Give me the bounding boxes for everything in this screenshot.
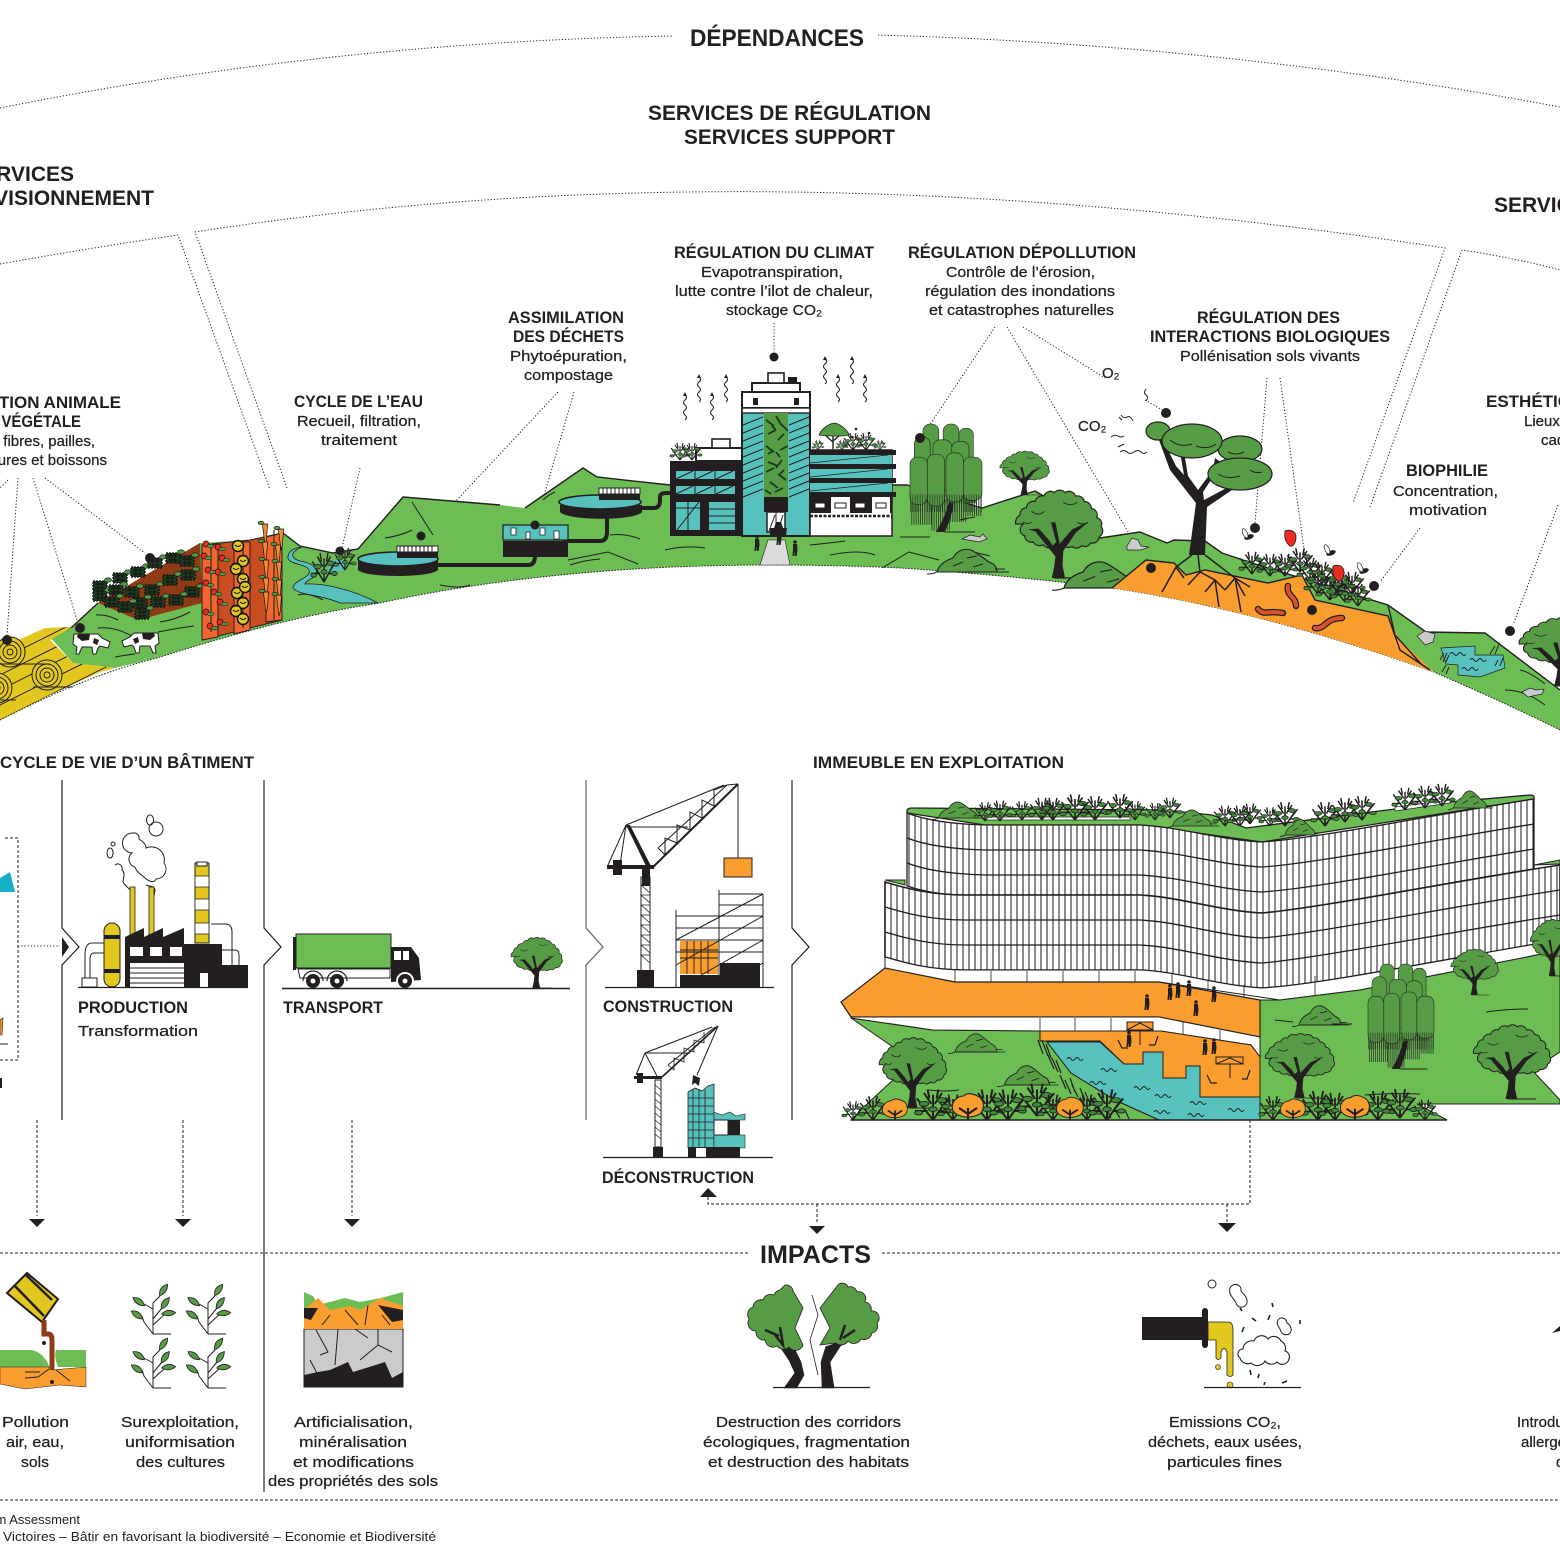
illustration: small tree — [1000, 451, 1049, 495]
label: régulation du climat: stockage CO₂ — [726, 302, 822, 319]
illustration: grazing cows — [73, 633, 159, 654]
illustration: umbrellas, chairs and people — [1118, 980, 1250, 1083]
building: white base band — [885, 940, 1560, 1000]
text: transport label: TRANSPORT — [283, 998, 384, 1017]
text: artificialisation: Artificialisation, — [294, 1414, 413, 1431]
heading: services d'approvisionnement (left, cropped) — [0, 163, 154, 210]
label: régulation dépollution: RÉGULATION DÉPOLLUTION — [908, 243, 1136, 262]
illustration: central green building — [670, 373, 896, 536]
stage: transport truck — [282, 934, 570, 1017]
text: pollution: sols — [21, 1454, 49, 1471]
footer sources — [0, 1512, 436, 1544]
stage: production factory — [78, 815, 248, 1040]
heading: impacts with dashed rule: IMPACTS — [760, 1241, 871, 1269]
heading: cycle de vie d'un bâtiment: CYCLE DE VIE D’UN BÂTIMENT — [0, 753, 255, 772]
dashed arrows from lifecycle stages to impacts — [29, 1120, 1250, 1234]
impact: artificialisation — [268, 1292, 438, 1490]
zone: orange plaza — [841, 968, 1260, 1057]
icon: split tree — [748, 1283, 879, 1388]
text: artificialisation — [268, 1414, 438, 1490]
zone: green lawn right — [1260, 950, 1560, 1120]
icon: partly demolished building — [603, 1084, 773, 1158]
label: cycle de l'eau: Recueil, filtration, — [297, 413, 421, 430]
label: cycle de l'eau: traitement — [321, 432, 398, 449]
label: production animale et végétale — [0, 393, 121, 469]
icon: scaffolded building — [605, 890, 774, 988]
label: cycle de l'eau: CYCLE DE L’EAU — [294, 392, 423, 411]
illustration: treatment station — [503, 525, 568, 557]
dotted bracket arc with diagonal leaders — [0, 192, 1560, 507]
text: artificialisation: minéralisation — [299, 1434, 407, 1451]
label: biophilie: motivation — [1409, 502, 1487, 519]
zone: teal water basin — [1038, 1040, 1260, 1120]
building: green roof and upper louvred block — [907, 795, 1534, 913]
footer sources: Victoires – Bâtir en favorisant la biodiversité – Economie et Biodiversité — [3, 1529, 436, 1544]
text: emissions: déchets, eaux usées, — [1148, 1434, 1302, 1451]
label: régulation dépollution: Contrôle de l’érosion, — [946, 264, 1095, 281]
building: left wing — [670, 439, 742, 536]
illustration: roof garden plants — [932, 784, 1493, 836]
heading: services de régulation et support — [648, 102, 931, 149]
icon: factory buildings and chimneys — [78, 862, 248, 988]
illustration: pollinators and meadow plants — [1239, 528, 1371, 606]
text: emissions: Emissions CO₂, — [1169, 1414, 1281, 1431]
panel: operating building illustration — [841, 784, 1560, 1120]
zone: orange soil layer with roots and worms — [1112, 555, 1434, 672]
heading: services de régulation et support: SERVICES DE RÉGULATION — [648, 102, 931, 125]
text: surexploitation — [121, 1414, 239, 1471]
text: emissions — [1148, 1414, 1302, 1471]
label: régulation dépollution — [908, 243, 1136, 319]
building: central tower — [742, 373, 810, 536]
illustration: willow tree — [910, 424, 982, 532]
label: régulation du climat — [674, 243, 875, 319]
zone: orange lower terrace — [1040, 1031, 1260, 1097]
illustration: treatment basin 1 — [358, 546, 438, 576]
text: pollution: Pollution — [2, 1414, 69, 1431]
text: deconstruction label: DÉCONSTRUCTION — [602, 1168, 754, 1187]
land: outline and dotted ground edge — [0, 468, 1560, 730]
label: esthétique (cropped) — [1486, 392, 1560, 449]
text: destruction: et destruction des habitats — [708, 1454, 909, 1471]
text: artificialisation: des propriétés des sols — [268, 1473, 438, 1490]
land: green terrain — [50, 468, 1560, 730]
heading: dépendances with dotted arc: DÉPENDANCES — [690, 24, 864, 52]
illustration: flowering hedge along the bottom — [842, 1084, 1447, 1120]
label: régulation dépollution: et catastrophes naturelles — [929, 302, 1114, 319]
text: production label: PRODUCTION — [78, 998, 188, 1017]
building: roof tree and plants — [812, 423, 886, 450]
building: lower louvred block — [885, 860, 1560, 988]
text: pollution — [2, 1414, 69, 1471]
zone: vegetable plots with tomatoes, squash and carrots — [201, 521, 284, 640]
impact: invasive species (cropped) — [1517, 1326, 1560, 1471]
text: surexploitation: des cultures — [136, 1454, 225, 1471]
dotted leader lines — [0, 323, 1558, 635]
illustration: umbrella pine tree — [1146, 422, 1272, 555]
label: régulation des interactions biologiques — [1150, 308, 1390, 365]
text: destruction — [703, 1414, 910, 1471]
text: emissions: particules fines — [1167, 1454, 1282, 1471]
label: biophilie: BIOPHILIE — [1406, 461, 1488, 480]
zone: winding river — [288, 547, 378, 603]
cropped extraction stage at left edge — [0, 838, 69, 1088]
icon: tower crane — [607, 784, 752, 987]
label: assimilation des déchets — [508, 308, 627, 384]
label: production animale et végétale: fibres, pailles, — [3, 433, 95, 450]
icon: demolition crane — [634, 1026, 718, 1157]
label: cycle de l'eau — [294, 392, 423, 449]
label: régulation du climat: lutte contre l’ilot de chaleur, — [675, 283, 873, 300]
label: régulation des interactions biologiques: Pollénisation sols vivants — [1180, 348, 1360, 365]
heading: dépendances with dotted arc — [0, 24, 1560, 108]
text: destruction: Destruction des corridors — [716, 1414, 901, 1431]
label: régulation des interactions biologiques: RÉGULATION DES — [1197, 308, 1340, 327]
text: gas symbols and wavy gas arrows: CO₂ — [1078, 418, 1106, 435]
text: production label — [78, 998, 198, 1040]
illustration: treatment basin 2 — [559, 488, 642, 519]
label: biophilie: Concentration, — [1393, 483, 1498, 500]
heading: services de régulation et support: SERVICES SUPPORT — [684, 126, 895, 149]
illustration: bushes and rocks — [900, 534, 1544, 697]
location dots — [2, 352, 1515, 645]
text: gas symbols and wavy gas arrows: O₂ — [1102, 365, 1120, 382]
impact: emissions — [1142, 1280, 1302, 1471]
icon: roadside tree — [511, 937, 562, 988]
label: assimilation des déchets: ASSIMILATION — [508, 308, 624, 327]
illustration: large tree — [1016, 490, 1103, 578]
illustration: black pipes — [432, 493, 672, 565]
text: surexploitation: Surexploitation, — [121, 1414, 239, 1431]
label: assimilation des déchets: Phytoépuration, — [510, 348, 627, 365]
illustration: heat waves rising from the building — [683, 356, 867, 420]
label: régulation du climat: RÉGULATION DU CLIMAT — [674, 243, 875, 262]
text: gas symbols and wavy gas arrows — [1078, 365, 1148, 454]
illustration: walking path and people — [754, 529, 798, 565]
stage: deconstruction crane and building — [602, 1026, 773, 1187]
heading: immeuble en exploitation: IMMEUBLE EN EXPLOITATION — [813, 753, 1064, 772]
illustration: pond with reeds — [1440, 644, 1505, 677]
label: assimilation des déchets: compostage — [524, 367, 613, 384]
icon: barrel pouring onto soil — [0, 1273, 86, 1389]
text: pollution: air, eau, — [6, 1434, 64, 1451]
icon: factory smoke — [107, 815, 166, 896]
label: régulation dépollution: régulation des inondations — [925, 283, 1115, 300]
label: assimilation des déchets: DES DÉCHETS — [513, 327, 624, 346]
stage: construction crane and scaffold — [603, 784, 774, 1016]
icon: truck — [282, 934, 570, 990]
impact: destruction of corridors — [703, 1283, 910, 1471]
impact: pollution — [0, 1273, 86, 1471]
label: biophilie — [1393, 461, 1498, 519]
text: production label: Transformation — [78, 1023, 198, 1040]
landscape band — [0, 356, 1560, 730]
zone: yellow hay field — [0, 627, 120, 720]
illustration: landscape trees — [879, 919, 1560, 1108]
stage dividers with chevrons — [62, 780, 809, 1492]
text: artificialisation: et modifications — [293, 1454, 414, 1471]
building: right wing — [810, 450, 896, 536]
impact: surexploitation — [121, 1283, 239, 1471]
icon: four plants — [130, 1283, 231, 1388]
zone: vineyard — [93, 543, 204, 620]
text: surexploitation: uniformisation — [125, 1434, 235, 1451]
icon: pipe with waste and smoke — [1142, 1280, 1301, 1388]
label: régulation du climat: Evapotranspiration, — [701, 264, 843, 281]
icon: soil cross-section — [304, 1292, 403, 1387]
label: régulation des interactions biologiques: INTERACTIONS BIOLOGIQUES — [1150, 327, 1390, 346]
dotted footer rule — [0, 1499, 1560, 1501]
text: destruction: écologiques, fragmentation — [703, 1434, 910, 1451]
text: construction label: CONSTRUCTION — [603, 997, 733, 1016]
zone: green lawn left — [851, 1018, 1159, 1120]
illustration: tree at right edge — [1519, 618, 1560, 686]
